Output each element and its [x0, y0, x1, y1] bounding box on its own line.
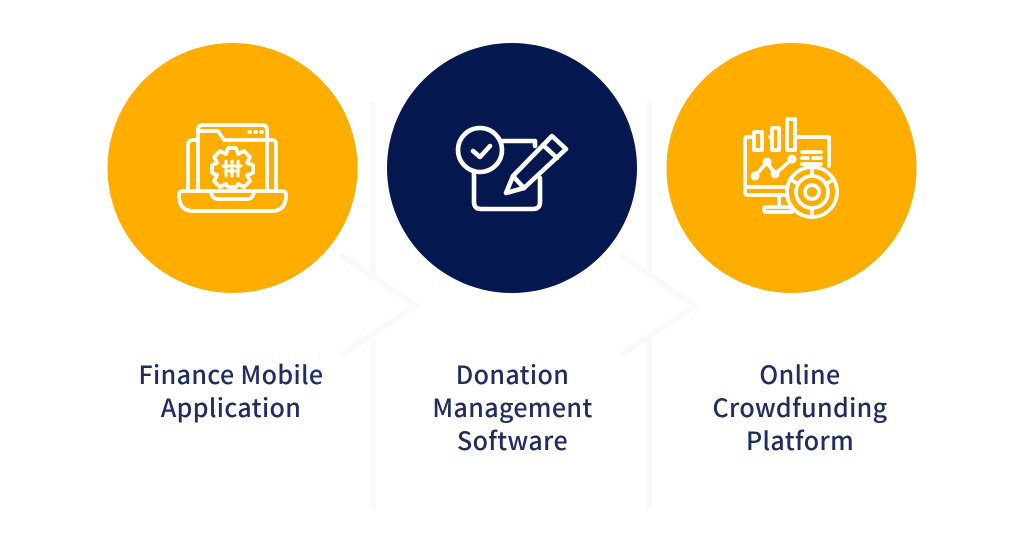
circle: donation management software — [387, 43, 637, 293]
arrow: first faint chevron divider — [341, 102, 416, 508]
icon: laptop with gear folder — [179, 125, 286, 211]
label: donation management software: Donation — [456, 356, 569, 392]
label: finance mobile application — [139, 356, 323, 425]
label: donation management software: Management — [432, 389, 593, 425]
label: donation management software — [432, 356, 593, 458]
label: donation management software: Software — [457, 422, 568, 458]
icon: checklist with pencil — [458, 128, 566, 209]
label: online crowdfunding platform: Online — [759, 356, 841, 392]
label: online crowdfunding platform: Platform — [746, 422, 854, 458]
label: finance mobile application: Finance Mobile — [139, 356, 323, 392]
label: finance mobile application: Application — [161, 389, 301, 425]
circle: finance mobile application — [108, 43, 358, 293]
label: online crowdfunding platform — [713, 356, 887, 458]
icon: monitor with charts and target — [745, 119, 837, 217]
circle: online crowdfunding platform — [666, 43, 916, 293]
label: online crowdfunding platform: Crowdfunding — [713, 389, 887, 425]
arrow: second faint chevron divider — [620, 102, 695, 508]
